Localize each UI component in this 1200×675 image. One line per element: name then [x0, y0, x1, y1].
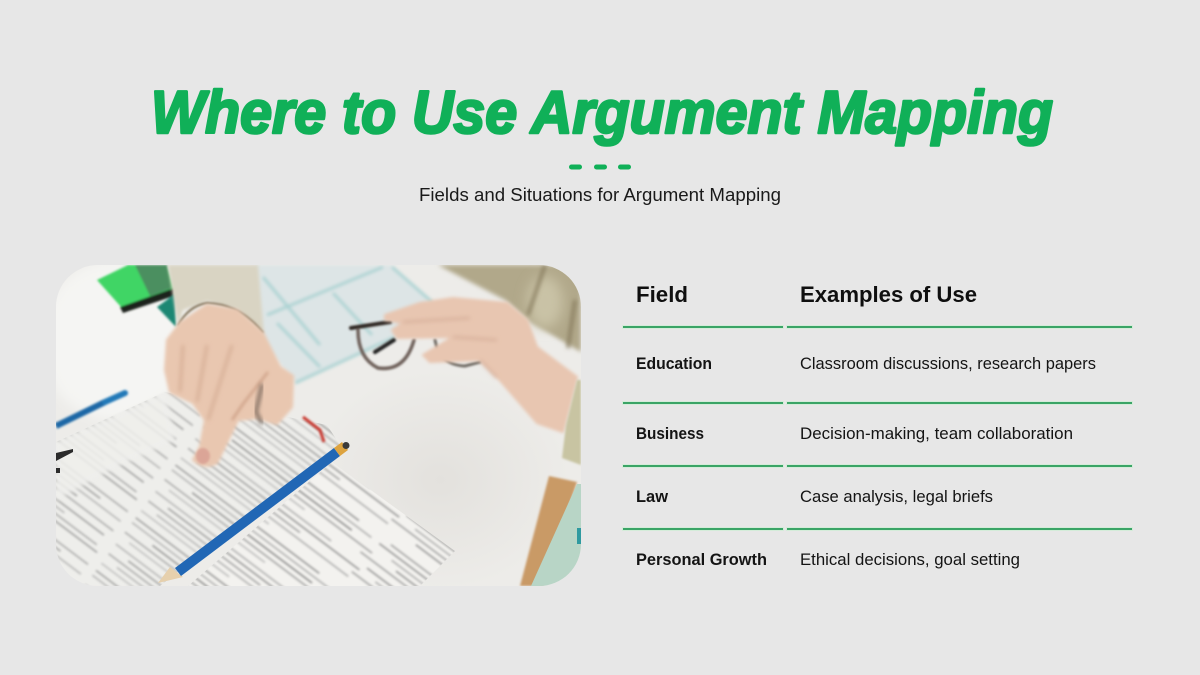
red bookmark tab [303, 417, 324, 442]
row: education: Education [636, 355, 712, 373]
glasses [351, 322, 480, 368]
row: personal growth: Ethical decisions, goal setting [800, 551, 1020, 569]
sleeve: left cuff [168, 265, 264, 334]
fingernail [196, 448, 210, 464]
highlighter [97, 265, 176, 327]
sleeve: bottom right [562, 380, 581, 465]
row: personal growth: Personal Growth [636, 551, 767, 569]
desk surface [56, 265, 581, 586]
row: law [636, 488, 993, 506]
right hand [385, 298, 577, 432]
row: law: Law [636, 488, 668, 506]
open book: left page [56, 392, 340, 586]
left hand [165, 265, 293, 466]
row: business [636, 425, 1073, 443]
mint notebook [531, 484, 581, 586]
row: business: Decision-making, team collaboration [800, 425, 1073, 443]
row: law: Case analysis, legal briefs [800, 488, 993, 506]
table header: Field [636, 282, 688, 307]
row: education: Classroom discussions, research papers [800, 355, 1096, 373]
table header: Examples of Use [800, 282, 977, 307]
cardboard folder [520, 476, 577, 586]
title: Where to Use Argument Mapping [151, 79, 1053, 146]
grid paper [255, 265, 432, 383]
right hand finger shading [403, 318, 497, 378]
blue pen [56, 393, 125, 426]
row: personal growth [636, 551, 1020, 569]
table [622, 282, 1133, 569]
pencil [158, 442, 350, 583]
table header [636, 282, 977, 307]
right page print [188, 463, 455, 586]
title accent dashes [569, 164, 631, 170]
open book: right page [333, 465, 454, 570]
row: education [636, 355, 1096, 373]
table rules [622, 325, 1133, 531]
photo: hands over an open book on a desk [56, 265, 581, 586]
subtitle: Fields and Situations for Argument Mapping [419, 185, 781, 205]
knuckle shadows [180, 345, 232, 420]
left page print [56, 392, 339, 586]
sleeve: top right [438, 265, 581, 352]
row: business: Business [636, 425, 704, 443]
black clips at book edge [56, 449, 73, 461]
